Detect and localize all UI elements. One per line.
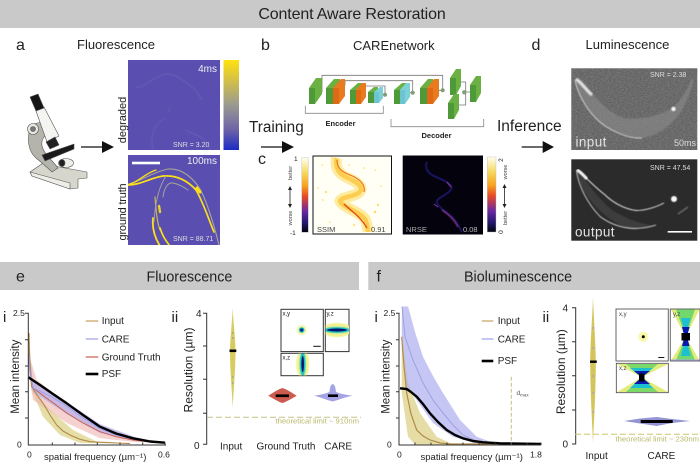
axis title: Resolution (µm) <box>182 328 196 412</box>
legend: Ground Truth <box>102 352 161 364</box>
section band e <box>0 262 359 290</box>
panel c: quality maps <box>258 151 509 237</box>
tick labels <box>13 308 170 460</box>
inset: x,y <box>616 309 668 361</box>
violin: CARE <box>624 417 690 426</box>
theoretical limit line <box>575 433 700 435</box>
legend: CARE <box>102 334 130 346</box>
axis label: degraded: degraded <box>117 97 129 143</box>
axis <box>203 313 207 444</box>
axis title x: spatial frequency (µm⁻¹) <box>44 452 146 463</box>
block 3 <box>350 83 366 104</box>
axis title x: spatial frequency (µm⁻¹) <box>420 452 523 463</box>
legend <box>86 316 161 380</box>
label i: i <box>374 309 378 326</box>
NRSE colorbar: 0 <box>498 230 505 234</box>
axis title y: Mean intensity <box>380 339 392 414</box>
SSIM colorbar: -1 <box>290 230 296 237</box>
inference label: Inference <box>497 118 562 135</box>
scale bar <box>668 231 692 233</box>
axis title y: Mean intensity <box>10 339 22 414</box>
heading: CAREnetwork: CAREnetwork <box>353 38 435 53</box>
dmax label: d <box>516 390 520 397</box>
title band <box>0 0 700 28</box>
NRSE colorbar: better <box>503 211 509 225</box>
SSIM colorbar: 1 <box>294 156 298 163</box>
theoretical limit label: theoretical limit ~ 230nm <box>616 435 699 444</box>
tick labels: 2.5 <box>384 308 396 318</box>
SSIM colorbar <box>288 156 308 237</box>
label: SNR: SNR = 47.54 <box>650 165 690 172</box>
NRSE map: 0.08 <box>463 225 478 234</box>
panel letter d: d <box>532 37 540 54</box>
label i: i <box>3 309 6 326</box>
legend: Input <box>102 316 124 327</box>
inset: x,z <box>280 352 324 376</box>
CARE curve <box>402 306 482 444</box>
violin: input <box>590 297 597 443</box>
dmax label: max <box>520 392 529 398</box>
CARE band <box>28 345 165 443</box>
tick labels: 1.8 <box>530 450 542 460</box>
NRSE colorbar: 2 <box>498 158 505 162</box>
SSIM colorbar: better <box>288 166 294 180</box>
category labels: Input <box>220 442 242 452</box>
image: degraded <box>128 60 220 150</box>
tick labels <box>562 304 568 451</box>
category labels: CARE <box>648 451 676 462</box>
category labels <box>220 442 352 452</box>
decoder bracket <box>391 119 484 127</box>
violin: ground truth <box>268 388 297 403</box>
image: output <box>571 159 697 241</box>
NRSE colorbar: worse <box>503 165 509 180</box>
NRSE map <box>403 156 483 234</box>
label ii: ii <box>542 309 549 326</box>
inset: x,z: x,z <box>619 366 627 372</box>
panel letter b: b <box>261 37 270 54</box>
chart f-ii: resolution violins <box>542 297 700 462</box>
legend: PSF <box>498 356 517 367</box>
inset: y,z <box>670 309 700 361</box>
SSIM map: 0.91 <box>371 225 386 234</box>
inset: y,z: y,z <box>326 312 334 318</box>
block 9 <box>470 76 481 102</box>
arrow: microscope to images <box>81 141 114 153</box>
inset: x,z <box>616 363 668 393</box>
input band <box>402 343 453 444</box>
title: Content Aware Restoration <box>258 6 446 23</box>
axes <box>396 313 541 445</box>
tick labels: 0 <box>562 440 568 451</box>
tick labels: 0.6 <box>158 450 170 460</box>
theoretical limit line <box>207 416 361 418</box>
block 1 <box>309 78 322 104</box>
category labels: Input <box>586 451 608 462</box>
violin: input <box>230 308 236 408</box>
tick labels <box>384 308 542 460</box>
chart e-ii: resolution violins <box>172 308 361 452</box>
colorbar <box>224 60 239 150</box>
label: output: output <box>575 224 615 240</box>
PSF curve <box>400 388 541 444</box>
label ii: ii <box>172 309 178 326</box>
NRSE map: NRSE <box>406 225 427 234</box>
tick labels: 0 <box>397 450 402 460</box>
input band <box>29 333 120 444</box>
category labels: CARE <box>324 442 352 452</box>
legend: Input <box>498 316 520 327</box>
label: 100ms: 100ms <box>187 156 217 167</box>
training label: Training <box>249 119 304 136</box>
tick labels: 0 <box>194 441 200 452</box>
inset: y,z <box>324 308 350 352</box>
image: input <box>571 68 697 150</box>
block 5 <box>394 83 410 104</box>
inset: x,y: x,y <box>619 312 627 318</box>
category labels <box>586 451 676 462</box>
image: ground truth <box>128 155 220 246</box>
PSF curve <box>28 377 165 443</box>
encoder bracket <box>305 106 383 113</box>
category labels: Ground Truth <box>256 442 315 452</box>
theoretical limit label: theoretical limit ~ 910nm <box>276 416 359 426</box>
block 2 <box>326 79 345 104</box>
chart e-i: spectra <box>3 308 170 463</box>
panel a: fluorescence acquisition <box>16 37 239 246</box>
SSIM map <box>313 156 392 234</box>
icon: microscope <box>28 94 87 189</box>
input curve <box>29 333 130 444</box>
panel letter a: a <box>16 37 25 54</box>
block 8 <box>448 94 459 119</box>
panel b: CAREnetwork <box>261 37 484 140</box>
label: SNR: SNR = 2.38 <box>650 72 686 79</box>
heading: Luminescence: Luminescence <box>586 37 669 52</box>
CARE curve <box>28 353 163 443</box>
panel letter c: c <box>258 151 266 168</box>
inset: x,y <box>281 309 323 352</box>
CARE band <box>402 306 490 443</box>
tick labels: 4 <box>562 304 568 314</box>
label: SNR: SNR = 3.20 <box>173 142 209 149</box>
heading: Fluorescence: Fluorescence <box>77 37 155 52</box>
ground truth band <box>28 353 165 443</box>
inset: x,z: x,z <box>282 356 290 362</box>
axes <box>25 313 166 445</box>
tick labels: 4 <box>196 309 202 320</box>
arrow: inference <box>522 141 554 153</box>
inset: x,y: x,y <box>282 312 290 318</box>
heading: Bioluminescence: Bioluminescence <box>464 270 572 286</box>
block 4 <box>368 87 383 103</box>
input curve <box>402 337 495 444</box>
label: input: input <box>576 134 607 150</box>
tick labels: 0 <box>17 440 22 450</box>
SSIM map: SSIM <box>317 225 335 234</box>
label: Decoder: Decoder <box>422 131 452 140</box>
axis label: ground truth: ground truth <box>117 183 129 240</box>
tick labels <box>194 309 202 452</box>
label: Encoder: Encoder <box>326 119 356 128</box>
tick labels: 0 <box>27 450 32 460</box>
violin: CARE <box>314 384 353 402</box>
label: 50ms: 50ms <box>674 138 696 148</box>
legend <box>482 316 526 367</box>
panel d: luminescence <box>532 37 697 241</box>
axis title: Resolution (µm) <box>554 329 568 414</box>
axis <box>572 308 576 444</box>
dmax line <box>510 377 512 445</box>
chart f-i: spectra <box>374 306 542 463</box>
ground truth curve <box>28 360 163 443</box>
inset: y,z: y,z <box>673 312 680 318</box>
block 6 <box>420 79 439 104</box>
SSIM colorbar: worse <box>288 211 294 226</box>
arrow: training <box>261 141 294 153</box>
network diagram <box>309 69 481 119</box>
NRSE colorbar <box>487 157 509 234</box>
block 7 <box>450 69 461 95</box>
label: 4ms: 4ms <box>198 64 217 75</box>
legend: CARE <box>498 334 526 346</box>
label: SNR: SNR = 88.71 <box>173 236 213 243</box>
panel letter f: f <box>376 268 382 286</box>
legend: PSF <box>102 369 121 380</box>
panel letter e: e <box>16 268 25 286</box>
heading: Fluorescence: Fluorescence <box>146 270 232 286</box>
tick labels: 2.5 <box>13 308 25 318</box>
tick labels: 0 <box>387 440 392 450</box>
scale bar <box>132 162 160 164</box>
section band f <box>368 262 700 290</box>
